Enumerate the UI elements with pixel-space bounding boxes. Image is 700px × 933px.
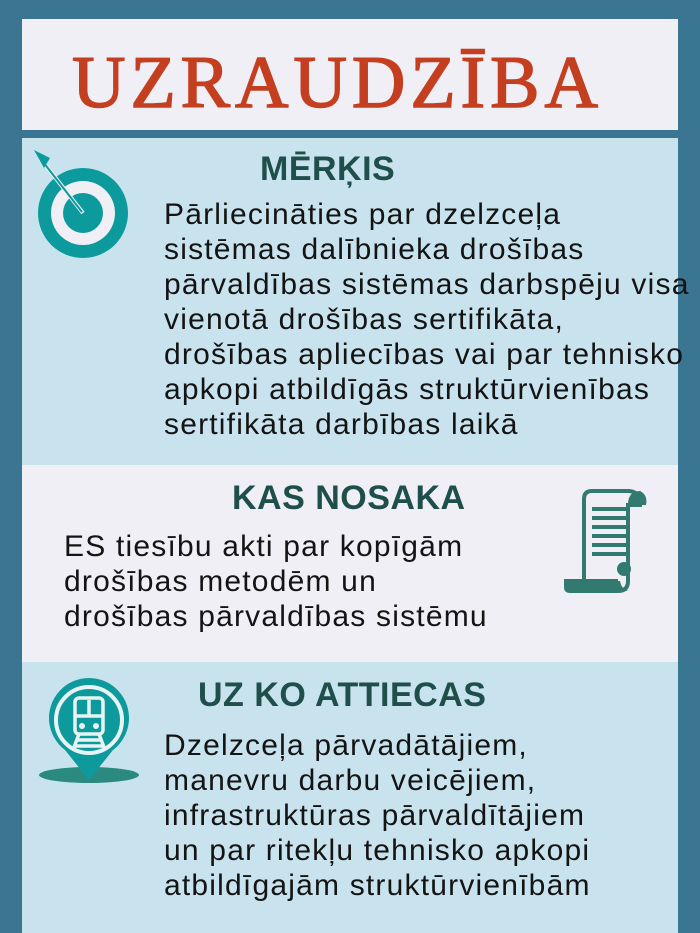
heading: UZ KO ATTIECAS (198, 676, 486, 714)
heading: KAS NOSAKA (232, 479, 466, 517)
text: Dzelzceļa pārvadātājiem, (164, 729, 528, 762)
icon: train pin (39, 678, 139, 783)
icon: scroll (564, 489, 646, 593)
panel: uz ko attiecas (22, 662, 678, 933)
panel: merkis (22, 138, 678, 465)
heading: MĒRĶIS (260, 150, 395, 188)
text: atbildīgajām struktūrvienībām (164, 869, 591, 902)
text: pārvaldības sistēmas darbspēju visa (164, 268, 690, 301)
text (164, 729, 591, 902)
text: manevru darbu veicējiem, (164, 764, 536, 797)
text: drošības metodēm un (64, 565, 377, 598)
text: sistēmas dalībnieka drošības (164, 233, 584, 266)
text: un par ritekļu tehnisko apkopi (164, 834, 590, 867)
text: Pārliecināties par dzelzceļa (164, 198, 561, 231)
text: drošības pārvaldības sistēmu (64, 600, 488, 633)
text: vienotā drošības sertifikāta, (164, 303, 564, 336)
text: sertifikāta darbības laikā (164, 408, 519, 441)
text (164, 198, 690, 441)
text: infrastruktūras pārvaldītājiem (164, 799, 585, 832)
text: apkopi atbildīgās struktūrvienības (164, 373, 650, 406)
title: UZRAUDZĪBA (72, 42, 603, 124)
title panel (22, 19, 678, 130)
text: ES tiesību akti par kopīgām (64, 530, 463, 563)
text (64, 530, 488, 633)
icon: target (34, 150, 128, 258)
text: drošības apliecības vai par tehnisko (164, 338, 684, 371)
panel: kas nosaka (22, 465, 678, 662)
